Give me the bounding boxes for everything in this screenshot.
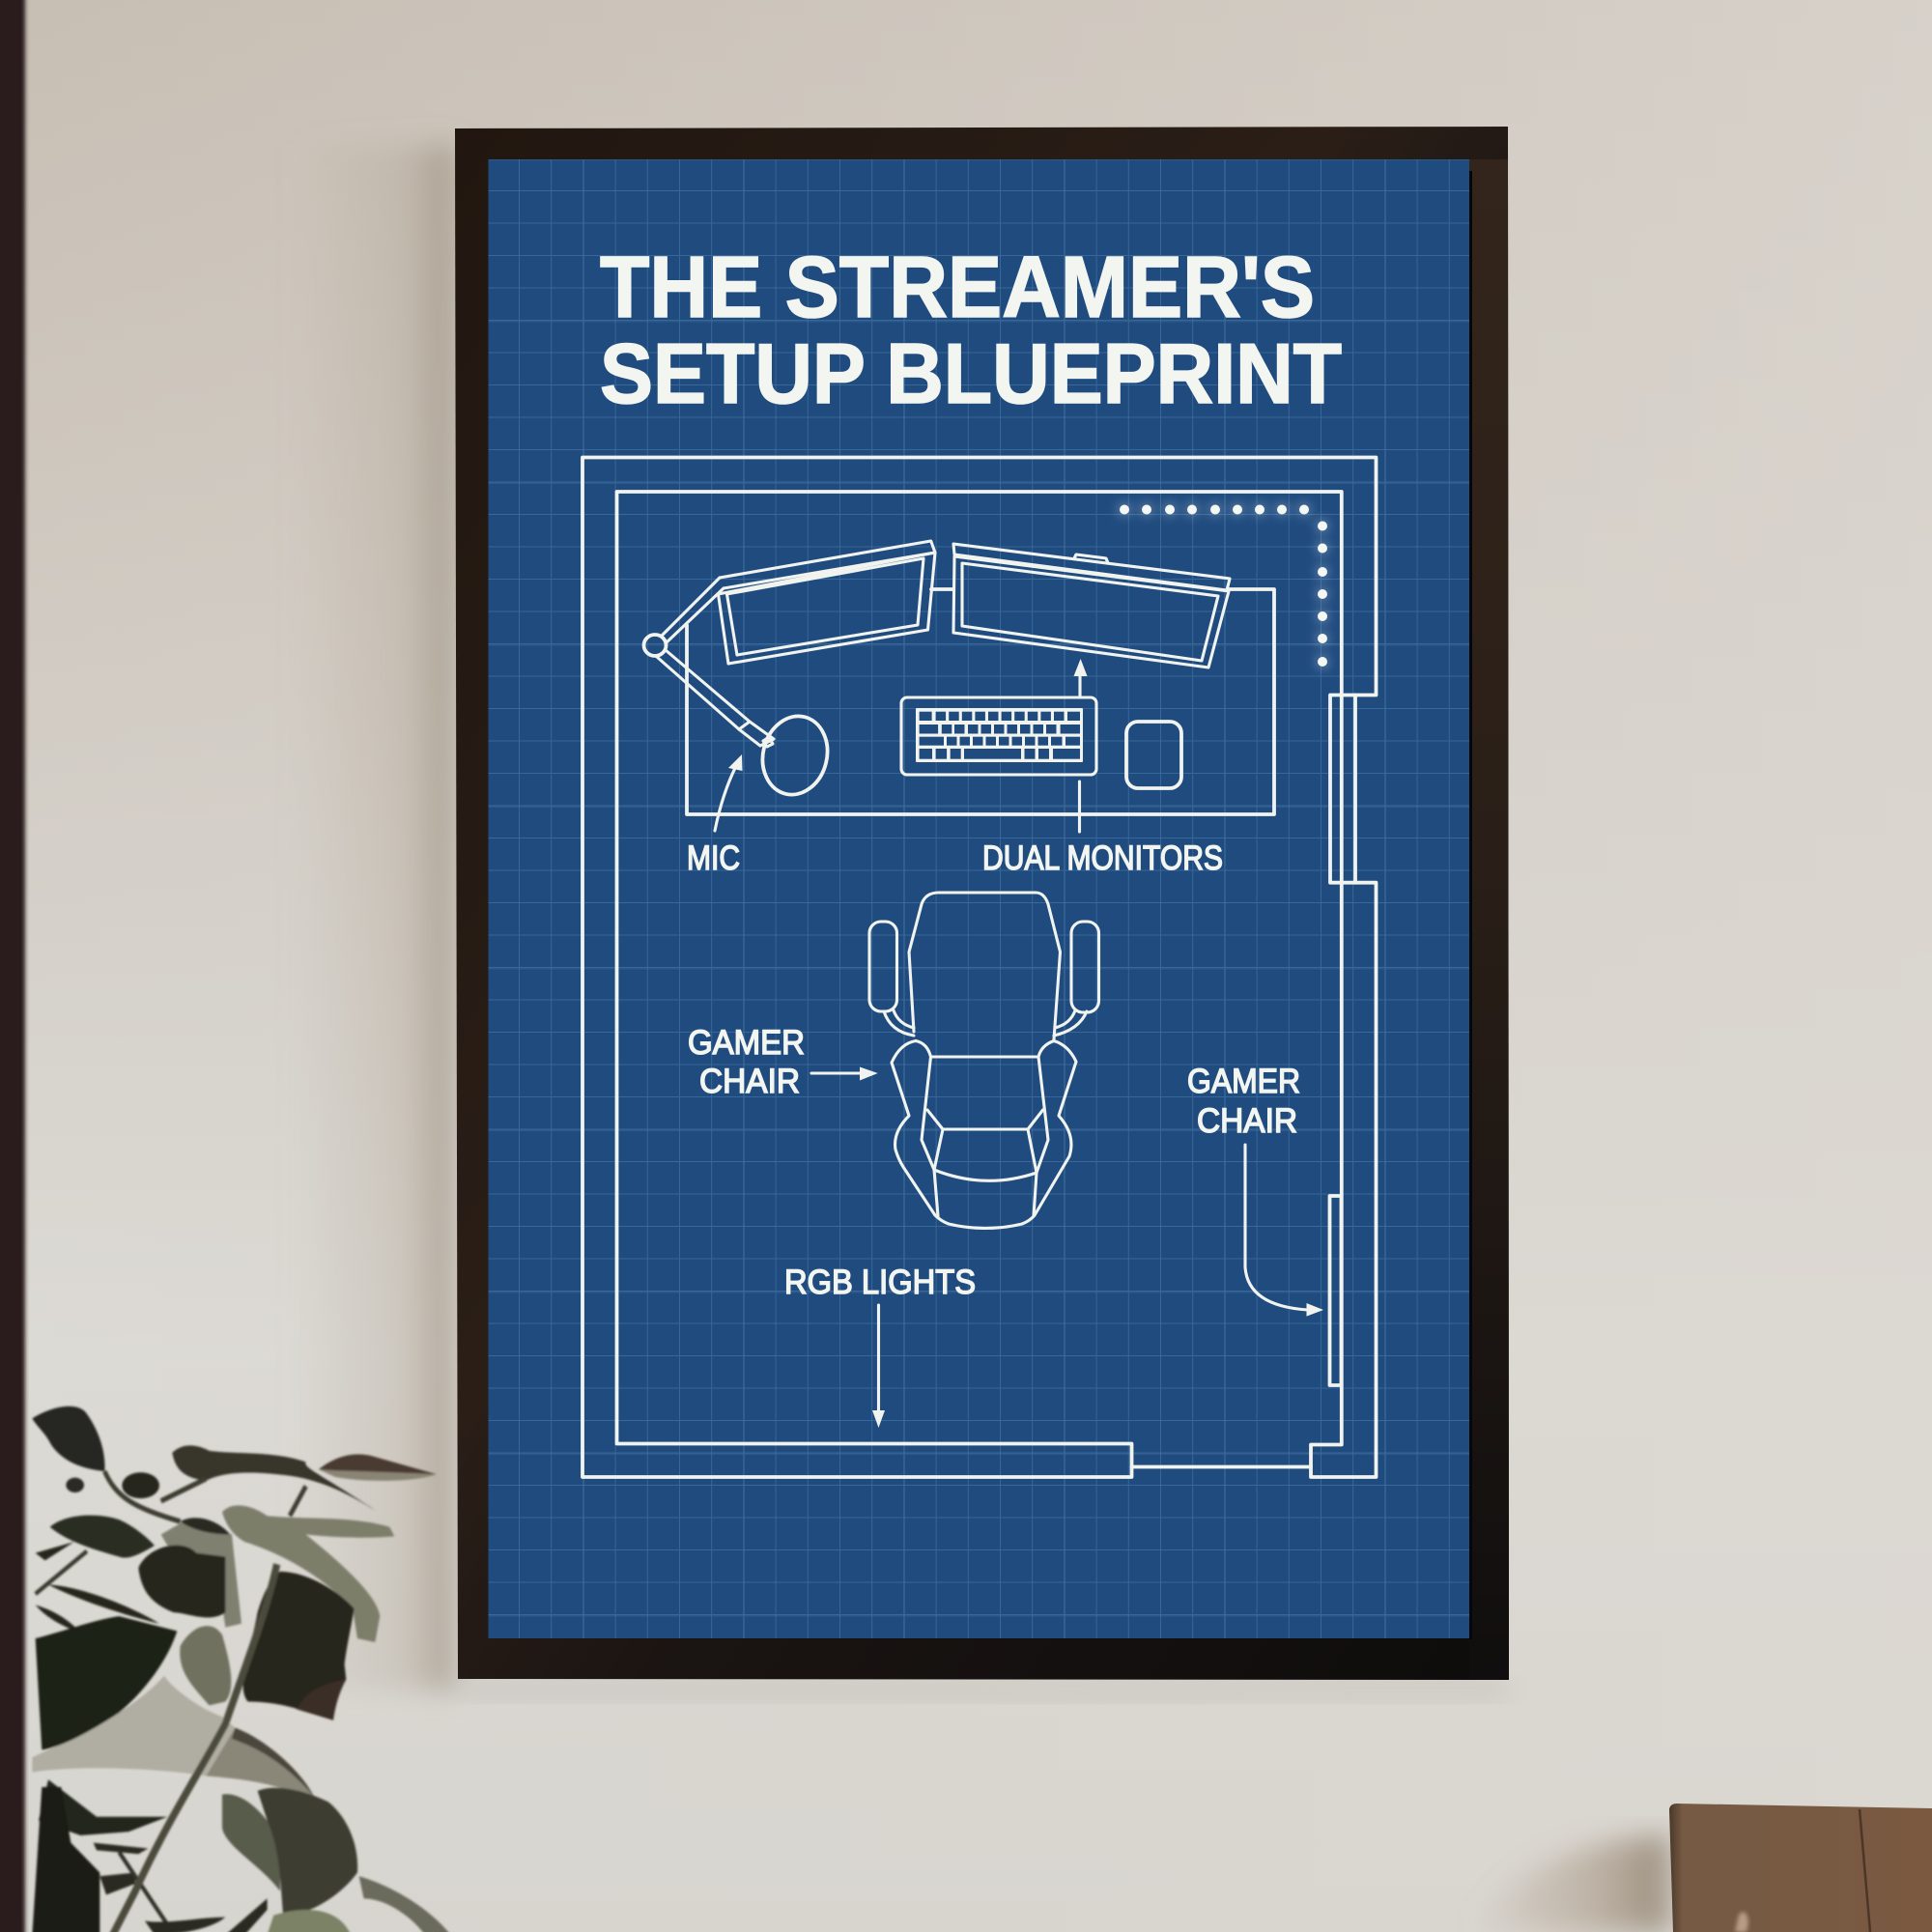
microphone boom and head: [643, 635, 836, 802]
label: dual monitors: DUAL MONITORS: [982, 839, 1223, 877]
label: gamer chair left: GAMER: [688, 1024, 805, 1062]
label: gamer chair right: CHAIR: [1197, 1102, 1297, 1140]
blueprint poster: [489, 159, 1469, 1638]
arrow: rgb lights: [872, 1305, 885, 1428]
keyboard: [901, 697, 1096, 775]
label: rgb lights: RGB LIGHTS: [784, 1264, 976, 1301]
wooden furniture corner: [1468, 1804, 1932, 1932]
right monitor: [953, 544, 1230, 668]
title: THE STREAMER'S: [600, 240, 1315, 336]
left monitor with arm: [662, 541, 935, 664]
mouse pad: [1126, 722, 1181, 788]
LED light strip dots: [1119, 504, 1328, 668]
gamer chair plan: [869, 893, 1099, 1229]
potted plant leaves: [32, 1406, 451, 1932]
arrow: gamer chair right curved: [1245, 1145, 1323, 1317]
arrow: dual monitors: [1074, 659, 1088, 832]
label: gamer chair left: CHAIR: [699, 1063, 800, 1100]
arrow: mic: [715, 754, 742, 831]
label: mic: MIC: [687, 839, 740, 877]
label: gamer chair right: [1187, 1063, 1300, 1140]
dark door edge at left: [0, 0, 25, 1932]
desk outline: [687, 589, 1274, 814]
picture frame: [455, 127, 1509, 1680]
label: gamer chair left: [688, 1024, 805, 1100]
label: gamer chair right: GAMER: [1187, 1063, 1300, 1100]
title: SETUP BLUEPRINT: [600, 326, 1342, 421]
arrow: gamer chair left: [811, 1066, 878, 1080]
floor plan walls: [582, 458, 1376, 1477]
title: [600, 240, 1342, 421]
